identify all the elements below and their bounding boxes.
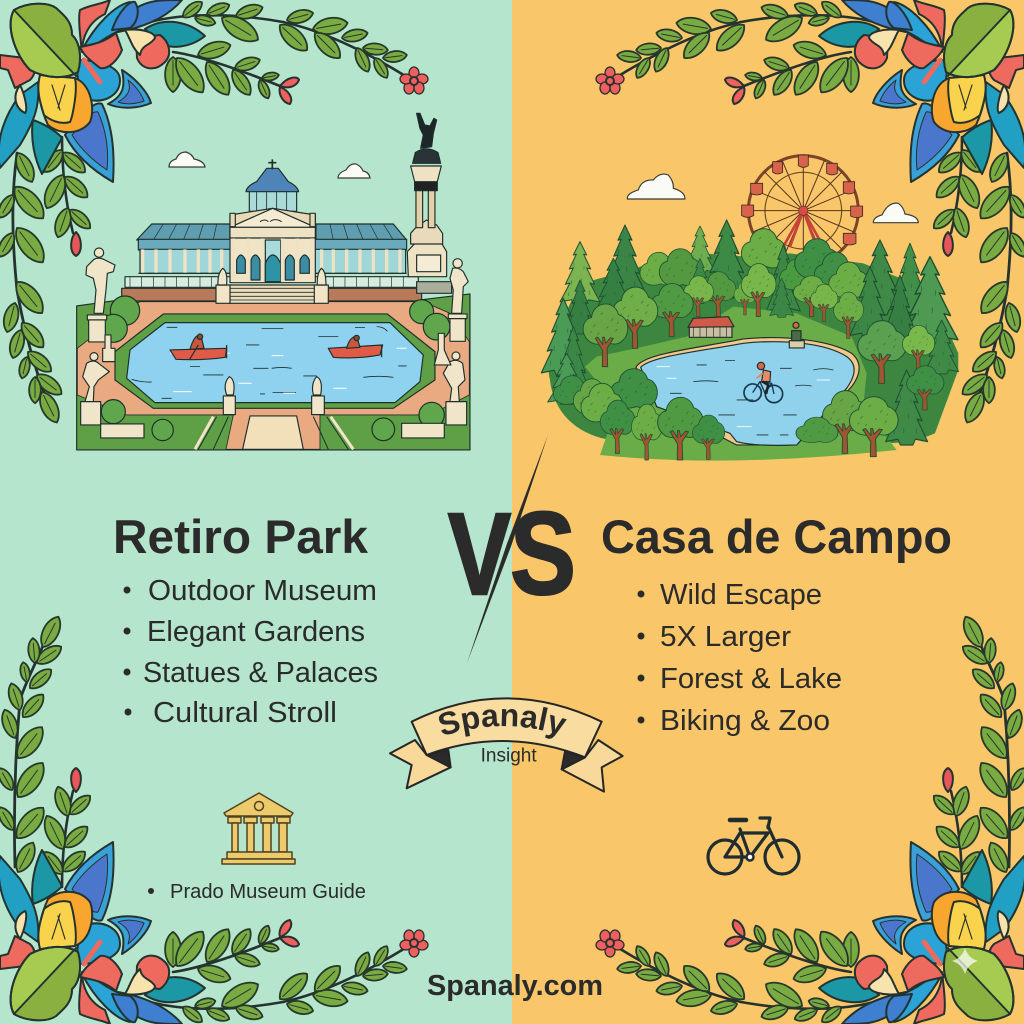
front trees	[548, 321, 944, 460]
climbing vine: bottom right	[959, 613, 1024, 875]
hedges	[99, 296, 450, 441]
bullet text: Prado Museum Guide: Prado Museum Guide	[170, 881, 366, 903]
floral corner: bottom left	[0, 768, 428, 1024]
title: Casa de Campo: Casa de Campo	[601, 510, 952, 563]
rowing boat: left	[170, 334, 227, 360]
icon: bicycle	[708, 818, 799, 874]
panel: Retiro Park background	[0, 0, 512, 1024]
rowing boat: right	[328, 335, 383, 358]
list: Casa de Campo features: Forest & Lake	[660, 663, 842, 695]
ground clearing	[585, 307, 897, 461]
banner: Spanaly Insight	[389, 697, 624, 793]
statues	[81, 248, 468, 425]
clouds: Retiro sky	[169, 152, 370, 178]
list: Retiro Park features: Cultural Stroll	[153, 697, 337, 729]
cyclist on lake	[744, 362, 783, 403]
sparkle mark	[952, 948, 978, 974]
illustration: Retiro Park palace and lake	[77, 113, 470, 450]
terrace and stairs	[122, 277, 422, 303]
list: Retiro Park features: Outdoor Museum	[148, 575, 377, 607]
forest backfill	[548, 253, 958, 443]
list: Retiro Park features: Statues & Palaces	[143, 657, 378, 689]
cabin	[688, 317, 734, 337]
floral corner: top left	[0, 0, 428, 256]
clouds	[627, 174, 918, 223]
list: Casa de Campo features: 5X Larger	[660, 621, 791, 653]
title: Retiro Park: Retiro Park	[113, 510, 369, 563]
back trees	[560, 220, 959, 374]
VS emblem	[448, 435, 576, 663]
banner: Spanaly Insight: Insight	[481, 746, 537, 767]
climbing vine: bottom left	[0, 613, 65, 875]
floral corner: top right	[596, 0, 1024, 256]
VS emblem: S	[510, 488, 576, 620]
list: Retiro Park features	[124, 575, 378, 729]
panel: Casa de Campo background	[512, 0, 1024, 1024]
list: Casa de Campo features: Biking & Zoo	[660, 705, 830, 737]
illustration: Casa de Campo forest and lake	[541, 155, 959, 461]
fountain path and benches	[101, 416, 444, 449]
hanging vine: top left	[0, 150, 66, 426]
middle trees	[541, 264, 863, 393]
list: Casa de Campo features: Wild Escape	[660, 579, 822, 611]
hanging vine: top right	[958, 150, 1024, 426]
central pavilion	[230, 159, 315, 283]
monument column with statue	[407, 113, 452, 293]
lake with shore	[636, 338, 859, 445]
floral corner: bottom right	[596, 768, 1024, 1024]
banner: Spanaly Insight: Spanaly	[438, 706, 567, 739]
footer: website: Spanaly.com	[427, 970, 603, 1002]
list: Retiro Park features: Elegant Gardens	[147, 616, 365, 648]
dock	[789, 322, 804, 348]
ferris wheel	[742, 155, 863, 266]
glass wings	[137, 224, 407, 273]
icon: museum	[222, 793, 295, 864]
list: Casa de Campo features	[638, 579, 842, 737]
VS emblem: V	[448, 489, 511, 619]
